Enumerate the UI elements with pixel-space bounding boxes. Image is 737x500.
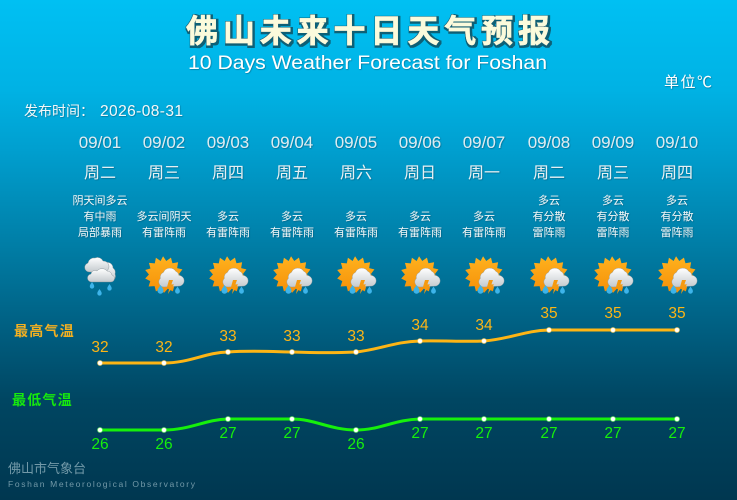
low temperature line chart <box>91 417 686 453</box>
publish time: 发布时间： <box>24 103 94 119</box>
weather descriptions: 雷阵雨 <box>660 225 694 239</box>
label: low temperature: 最低气温 <box>12 392 73 408</box>
weather descriptions: 多云 <box>281 209 303 223</box>
weather descriptions: 有分散 <box>596 209 630 223</box>
high temperature line chart: 32 <box>155 339 173 356</box>
weather descriptions: 多云 <box>345 209 367 223</box>
dates row: 09/01 <box>79 133 121 152</box>
high temperature line chart: 33 <box>219 328 237 345</box>
low temperature line chart: 27 <box>540 425 558 442</box>
high temperature line chart: 35 <box>668 305 686 322</box>
subtitle: 10 Days Weather Forecast for Foshan <box>188 52 547 74</box>
weather descriptions: 有雷阵雨 <box>142 225 186 239</box>
weekdays row: 周三 <box>148 165 180 182</box>
dates row: 09/06 <box>399 133 441 152</box>
high temperature line chart: 35 <box>540 305 558 322</box>
dates row: 09/07 <box>463 133 505 152</box>
high temperature line chart: 33 <box>347 328 365 345</box>
weekdays row: 周四 <box>661 165 693 182</box>
icon: sun, cloud and thunderstorm 09/06 <box>401 256 440 294</box>
weather descriptions: 多云 <box>666 193 688 207</box>
weather descriptions: 有雷阵雨 <box>334 225 378 239</box>
weather descriptions: 有中雨 <box>84 209 116 223</box>
low temperature line chart: 27 <box>475 425 493 442</box>
weekdays row: 周一 <box>468 165 500 182</box>
weather descriptions: 有雷阵雨 <box>398 225 442 239</box>
label: high temperature: 最高气温 <box>14 323 75 339</box>
icon: cloud with rain <box>85 257 116 296</box>
low temperature line chart: 26 <box>347 436 365 453</box>
weather descriptions: 有雷阵雨 <box>462 225 506 239</box>
icon: sun, cloud and thunderstorm 09/04 <box>273 256 312 294</box>
high temperature line chart: 35 <box>604 305 622 322</box>
icon: sun, cloud and thunderstorm 09/02 <box>145 256 184 294</box>
dates row: 09/03 <box>207 133 249 152</box>
low temperature line chart: 27 <box>668 425 686 442</box>
weekdays row: 周四 <box>212 165 244 182</box>
low temperature line chart: 27 <box>411 425 429 442</box>
high temperature line chart: 34 <box>411 317 429 334</box>
weather descriptions: 多云 <box>602 193 624 207</box>
icon: sun, cloud and thunderstorm 09/03 <box>209 256 248 294</box>
observatory English name: Foshan Meteorological Observatory <box>8 479 196 489</box>
weather descriptions: 多云 <box>473 209 495 223</box>
weather descriptions: 有雷阵雨 <box>206 225 250 239</box>
icon: sun, cloud and thunderstorm 09/10 <box>658 256 697 294</box>
weather descriptions: 多云 <box>217 209 239 223</box>
low temperature line chart: 27 <box>219 425 237 442</box>
icon: sun, cloud and thunderstorm 09/08 <box>530 256 569 294</box>
dates row: 09/05 <box>335 133 377 152</box>
low temperature line chart: 27 <box>283 425 301 442</box>
low temperature line chart: 26 <box>91 436 109 453</box>
weather descriptions: 雷阵雨 <box>532 225 566 239</box>
weather descriptions: 阴天间多云 <box>72 193 128 207</box>
publish time: 2026-08-31 <box>100 103 183 120</box>
weather descriptions: 局部暴雨 <box>78 225 122 239</box>
weather descriptions: 有雷阵雨 <box>270 225 314 239</box>
dates row <box>79 133 698 152</box>
weekdays row: 周二 <box>533 165 565 182</box>
icon: sun, cloud and thunderstorm 09/09 <box>594 256 633 294</box>
weather descriptions: 多云 <box>409 209 431 223</box>
title: 佛山未来十日天气预报 <box>186 13 550 49</box>
high temperature line chart <box>91 305 686 365</box>
weekdays row: 周日 <box>404 165 436 182</box>
dates row: 09/09 <box>592 133 634 152</box>
high temperature line chart: 34 <box>475 317 493 334</box>
weekdays row: 周三 <box>597 165 629 182</box>
dates row: 09/02 <box>143 133 185 152</box>
dates row: 09/04 <box>271 133 313 152</box>
low temperature line chart: 26 <box>155 436 173 453</box>
weather descriptions: 多云间阴天 <box>136 209 192 223</box>
high temperature line chart: 32 <box>91 339 109 356</box>
unit label: 单位℃ <box>664 74 712 91</box>
weekdays row <box>84 164 693 182</box>
observatory name: 佛山市气象台 <box>8 461 86 476</box>
weekdays row: 周二 <box>84 165 116 182</box>
weather descriptions <box>72 193 694 239</box>
weather descriptions: 有分散 <box>660 209 694 223</box>
icon: sun, cloud and thunderstorm 09/07 <box>465 256 504 294</box>
dates row: 09/08 <box>528 133 570 152</box>
weather descriptions: 多云 <box>538 193 560 207</box>
weekdays row: 周六 <box>340 164 372 182</box>
dates row: 09/10 <box>656 133 698 152</box>
weather descriptions: 雷阵雨 <box>596 225 630 239</box>
weather descriptions: 有分散 <box>532 209 566 223</box>
icon: sun, cloud and thunderstorm 09/05 <box>337 256 376 294</box>
high temperature line chart: 33 <box>283 328 301 345</box>
weekdays row: 周五 <box>276 165 308 182</box>
low temperature line chart: 27 <box>604 425 622 442</box>
